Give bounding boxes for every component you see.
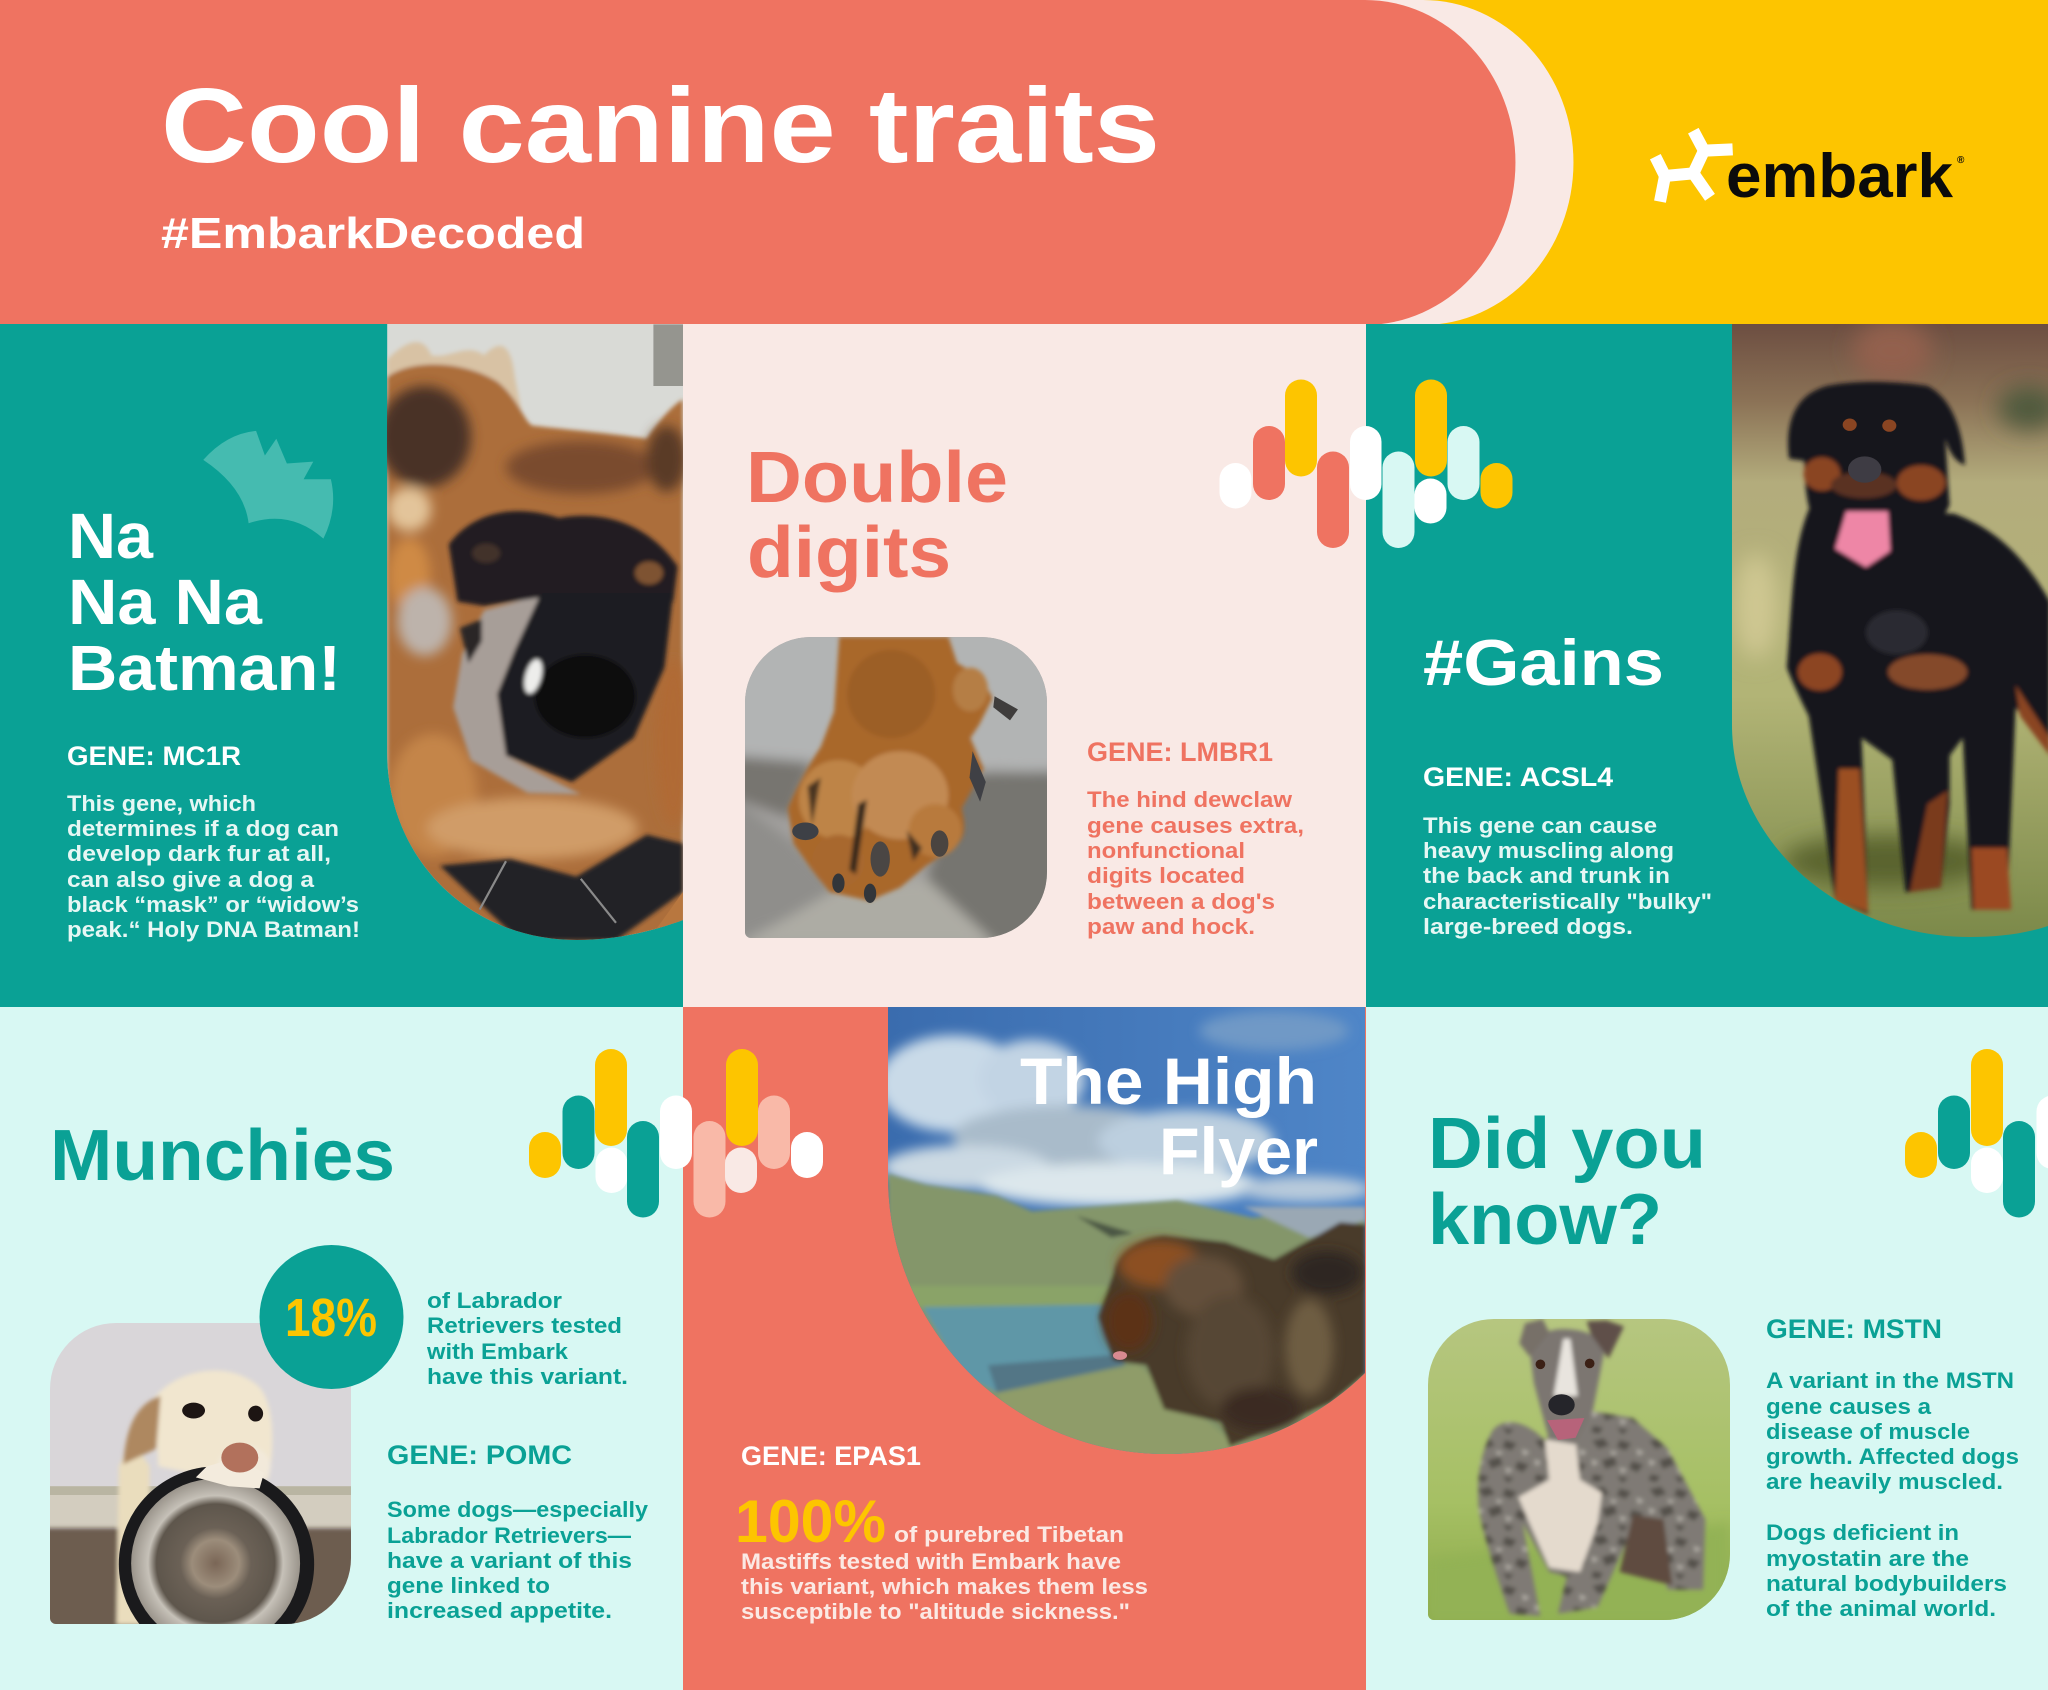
gene label: MC1R: GENE: MC1R [67, 741, 241, 771]
body text: MC1R: peak.“ Holy DNA Batman! [67, 917, 360, 942]
header band [0, 0, 2048, 325]
heading: Double digits: digits [747, 513, 951, 593]
heading: Na Na Na Batman: Batman! [68, 632, 341, 704]
stat: 100%: 100% [735, 1488, 886, 1555]
heading: Na Na Na Batman [68, 500, 341, 704]
heading: The High Flyer [1020, 1044, 1318, 1188]
gene label: MSTN: GENE: MSTN [1766, 1314, 1942, 1344]
panel: Munchies [0, 1007, 683, 1690]
body text: MSTN: Dogs deficient in [1766, 1520, 1959, 1545]
panel: #Gains [1366, 320, 2048, 1007]
body text: MSTN: growth. Affected dogs [1766, 1444, 2019, 1469]
heading: Na Na Na Batman: Na [68, 500, 153, 572]
stat caption: with Embark [426, 1339, 569, 1364]
photo: brown dog face [378, 320, 691, 945]
body text: POMC: gene linked to [387, 1573, 550, 1598]
stat caption: have this variant. [427, 1364, 628, 1389]
stat circle: 18% [260, 1245, 404, 1389]
body text: MC1R: can also give a dog a [67, 867, 315, 892]
heading: The High Flyer: Flyer [1159, 1114, 1318, 1188]
heading: #Gains: #Gains [1423, 626, 1664, 699]
heading: Double digits [746, 438, 1008, 593]
stat caption: Retrievers tested [427, 1313, 622, 1338]
body text: MSTN [1766, 1368, 2019, 1621]
heading: Double digits: Double [746, 438, 1008, 518]
body text: LMBR1: gene causes extra, [1087, 813, 1304, 838]
body text: MC1R: develop dark fur at all, [67, 841, 331, 866]
photo: rottweiler [1730, 320, 2048, 945]
body text: LMBR1: between a dog's [1087, 889, 1275, 914]
body text: EPAS1: this variant, which makes them less [741, 1574, 1148, 1599]
body text: MSTN: disease of muscle [1766, 1419, 1970, 1444]
heading: The High Flyer: The High [1020, 1044, 1317, 1118]
photo: labrador with bowl [50, 1323, 351, 1624]
heading: Did you know: know? [1428, 1180, 1662, 1260]
body text: MC1R [67, 791, 360, 942]
body text: MSTN: myostatin are the [1766, 1546, 1969, 1571]
panel: The High Flyer [683, 1000, 1371, 1690]
body text: POMC: Labrador Retrievers— [387, 1523, 631, 1548]
icon: bat wing [203, 431, 333, 539]
body text: EPAS1: susceptible to "altitude sickness." [741, 1599, 1130, 1624]
DNA wave: bottom right [1905, 1049, 2048, 1218]
gene label: POMC: GENE: POMC [387, 1440, 572, 1470]
body text: POMC [387, 1497, 649, 1623]
photo: running whippet [1426, 1317, 1734, 1625]
body text: LMBR1: nonfunctional [1087, 838, 1245, 863]
body text: MSTN: are heavily muscled. [1766, 1469, 2003, 1494]
panel: Double digits [683, 324, 1366, 1007]
panel: Na Na Na Batman [0, 320, 691, 1007]
panel: Did you know [1366, 1007, 2048, 1690]
photo: Tibetan mastiff by lake [878, 1000, 1371, 1462]
body text: ACSL4 [1423, 813, 1712, 939]
body text: POMC: increased appetite. [387, 1598, 612, 1623]
body text: ACSL4: large-breed dogs. [1423, 914, 1633, 939]
logo: embark: ® [1957, 155, 1965, 166]
body text: MSTN: of the animal world. [1766, 1596, 1996, 1621]
DNA wave: bottom centre [529, 1049, 823, 1218]
DNA wave: top [1220, 380, 1512, 548]
body text: EPAS1: Mastiffs tested with Embark have [741, 1549, 1121, 1574]
heading: Munchies: Munchies [50, 1116, 395, 1196]
stat caption [426, 1288, 628, 1389]
body text: LMBR1: The hind dewclaw [1087, 787, 1293, 812]
body text: POMC: have a variant of this [387, 1548, 632, 1573]
stat circle: 18%: 18% [285, 1288, 377, 1348]
logo: embark: embark [1726, 142, 1954, 211]
body text: ACSL4: the back and trunk in [1423, 863, 1670, 888]
body text: MSTN: gene causes a [1766, 1394, 1932, 1419]
heading: Did you know: Did you [1428, 1104, 1706, 1184]
body text: ACSL4: heavy muscling along [1423, 838, 1674, 863]
body text: ACSL4: This gene can cause [1423, 813, 1657, 838]
body text: LMBR1: digits located [1087, 863, 1245, 888]
body text: MSTN: natural bodybuilders [1766, 1571, 2007, 1596]
heading: Na Na Na Batman: Na Na [68, 566, 262, 638]
photo: dog paw [745, 637, 1047, 938]
subtitle hashtag: #EmbarkDecoded [161, 209, 585, 258]
heading: Did you know [1428, 1104, 1706, 1260]
body text: MC1R: This gene, which [67, 791, 256, 816]
body text: MC1R: black “mask” or “widow’s [67, 892, 359, 917]
gene label: EPAS1: GENE: EPAS1 [741, 1441, 921, 1471]
gene label: LMBR1: GENE: LMBR1 [1087, 737, 1273, 767]
body text: EPAS1: of purebred Tibetan [894, 1522, 1124, 1547]
body text: LMBR1 [1087, 787, 1304, 939]
body text: EPAS1 [741, 1522, 1148, 1624]
body text: LMBR1: paw and hock. [1087, 914, 1255, 939]
gene label: ACSL4: GENE: ACSL4 [1423, 762, 1613, 792]
body text: ACSL4: characteristically "bulky" [1423, 889, 1712, 914]
body text: MC1R: determines if a dog can [67, 816, 339, 841]
stat caption: of Labrador [427, 1288, 562, 1313]
logo: embark [1655, 131, 1965, 211]
title: Cool canine traits [161, 67, 1160, 185]
body text: POMC: Some dogs—especially [387, 1497, 649, 1522]
body text: MSTN: A variant in the MSTN [1766, 1368, 2014, 1393]
